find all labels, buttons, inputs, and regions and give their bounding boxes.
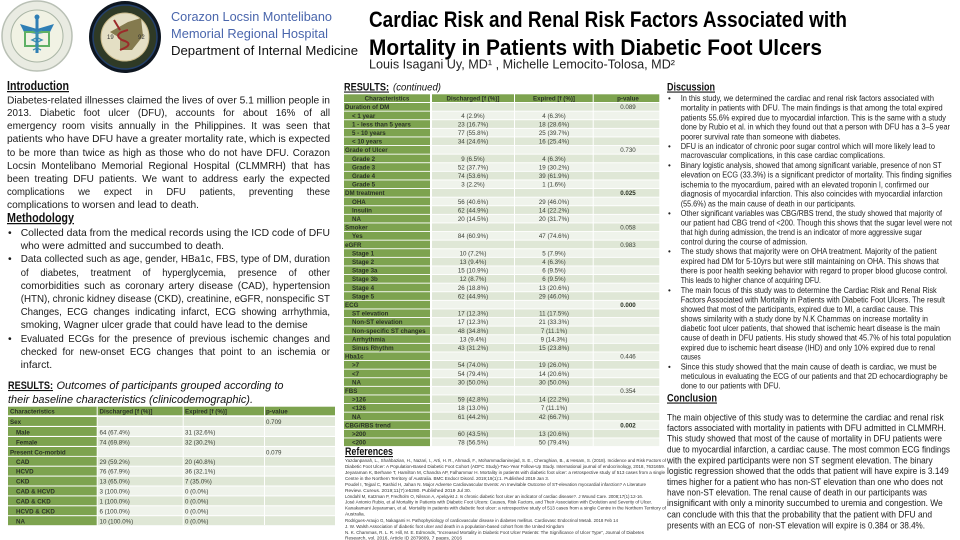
table text: 6 (9.5%) [542,276,566,283]
table: baseline characteristics: NA [16,518,25,525]
text block: discussion bullets: • [668,286,671,295]
text block: discussion bullets: expired had DM for 5-10yrs but were still maintaining on OHA. This shows that [681,257,940,266]
table text: Sinus Rhythm [352,345,394,352]
table text: 20 (14.5%) [458,216,488,223]
panel: methodology [7,211,331,371]
text block: discussion bullets: (55.6%) as the main cause of death in our participants. [681,199,856,208]
heading: results clinicodemographic: their baseline characteristics (clinicodemographic). [8,394,253,406]
table text: 12 (8.7%) [460,276,486,283]
text block: reference list: J. W. Walsh Association of diabetic foot ulcer and death in a population-based cohort from the United Kingdom [345,524,564,530]
heading: discussion: Discussion [667,82,715,94]
table text: 17 (12.3%) [458,319,488,326]
table text: 0.000 [620,302,636,309]
table text: 39 (61.9%) [539,173,569,180]
text block: discussion bullets: • [668,247,671,256]
heading: methodology: Methodology [7,211,74,225]
text block: introduction body: to be more than twice as high as those who do not have DFU. Corazon [7,148,330,159]
table text: ST elevation [352,311,389,318]
text block: discussion bullets: The study shows that majority were on OHA treatment. Majority of the patient [681,247,937,256]
heading: results continued: RESULTS: [344,82,389,94]
text block: discussion bullets: Factors Associated with Mortality in Patients with Diabetic Foot Ulcers. The result [681,295,946,304]
table text: 10 (7.2%) [460,250,486,257]
table: baseline characteristics: Expired [f (%)] [185,408,227,415]
table text: 3 (2.2%) [461,182,485,189]
text block: reference list: Yazdanpanah, L., Shahbazian, H., Nazari, I., Arti, H. R., Ahmadi, F., Mohammadianinejad, S. E., Cheraghian, B., & Hesam, S. (2018). Incidence and Risk Factors of [345,458,667,464]
heading: introduction: Introduction [7,79,69,93]
table text: 77 (55.8%) [458,130,488,137]
table text: 47 (74.6%) [539,233,569,240]
table text: 19 (26.0%) [539,362,569,369]
table text: 61 (44.2%) [458,414,488,421]
table text: 29 (46.0%) [539,199,569,206]
table text: 56 (40.6%) [458,199,488,206]
table: baseline characteristics: Characteristics [10,408,55,415]
table: baseline characteristics: CAD & CKD [16,499,51,506]
text block: reference list: N. K. Chammas, R. L. R. Hill, M. E. Edmonds, "Increased Mortality in Diabetic Foot Ulcer Patients: The Significance of Ulcer Type", Journal of Diabetes [345,530,645,536]
table: baseline characteristics: 1 (100.0%) [100,499,130,506]
table text: 50 (79.4%) [539,440,569,447]
table text: 14 (20.6%) [539,371,569,378]
table text: Yes [352,233,363,240]
text block: discussion bullets: there is poor health seeking behavior with regard to proper blood glucose control. [681,266,948,275]
table text: 23 (16.7%) [458,121,488,128]
table: baseline characteristics: 29 (59.2%) [100,459,130,466]
text block: introduction body: emergency room visits annually in the Philippines. It was seen that [7,121,330,132]
table text: 4 (6.3%) [542,113,566,120]
text block: discussion bullets: macrovascular complications, in this case cardiac complications. [681,151,885,160]
table text: 62 (44.9%) [458,207,488,214]
text block: discussion bullets: done to our patients with DFU. [681,382,781,391]
icon: department of medicine seal: 19 [107,35,114,41]
table text: 5 (7.9%) [542,250,566,257]
title [369,7,847,60]
table text: Stage 5 [352,293,375,300]
table: baseline characteristics: CAD [16,459,30,466]
table text: Stage 3a [352,268,378,275]
text block: discussion bullets: • [668,161,671,170]
heading: conclusion: Conclusion [667,392,717,404]
table text: DM treatment [345,190,385,197]
table text: Expired [f (%)] [533,96,575,103]
table: baseline characteristics: 6 (100.0%) [100,509,130,516]
table text: Grade 4 [352,173,376,180]
text block: reference list: Review. Cureus. 2019;11(7):e5280. Published 2019 Jul 30. [345,488,471,494]
text block: discussion bullets: showed that most of the participants, expired due to MI, a cardiac cause. This [681,305,923,314]
text block: reference list: Jeyaraman K, Berhane T, Hamilton M, Chandra AP, Falhammar H. Mortality in patients with diabetic foot ulcer: a retrospective study of 513 cases from a single [345,470,665,476]
table text: <126 [352,405,366,412]
table text: 18 (28.6%) [539,121,569,128]
table text: 4 (6.3%) [542,156,566,163]
table: baseline characteristics: 0 (0.0%) [185,509,208,516]
table text: 1 (1.6%) [542,182,566,189]
table text: ECG [345,302,359,309]
text block: reference list: Diabetic Foot Ulcer: A Population-Based Diabetic Foot Cohort (ADFC Study)-Two-Year Follow-Up Study. International journal of endocrinology, 2018, 7631659. [345,464,665,470]
text block: discussion bullets: DFU is an indicator of chronic poor sugar control which will more likely lead to [681,142,936,151]
table text: 30 (50.0%) [539,379,569,386]
table text: Duration of DM [345,104,389,111]
table text: 13 (9.4%) [460,336,486,343]
text block: methodology bullets: checked for new-onset ECG changes that point to an ischemia or [21,347,331,358]
hospital name: Memorial Regional Hospital [171,26,328,41]
table: baseline characteristics: 0 (0.0%) [185,499,208,506]
table text: Non-ST elevation [352,319,403,326]
text block: methodology bullets: • [8,254,12,265]
text block: methodology bullets: comorbidities such as coronary artery disease (CAD), hypertension [21,281,330,292]
table text [345,96,639,447]
table text: 13 (20.6%) [539,285,569,292]
table text: 54 (79.4%) [458,371,488,378]
table: results continued [344,94,659,447]
table text: 13 (9.4%) [460,259,486,266]
text block: reference list: Kanakamani Jeyaraman, et al. Mortality in patients with diabetic foot ulcer: a retrospective study of 513 cases from a single Centre in the Northern Territory of [345,506,667,512]
text block: reference list [345,458,667,540]
table text: 5 - 10 years [352,130,386,137]
table text: 0.983 [620,242,636,249]
table: baseline characteristics: Female [16,439,38,446]
table text: 18 (13.0%) [458,405,488,412]
text block: discussion bullets: diabetic foot ulcer patients, that showed that ischemic heart disease is the main [681,324,940,333]
table: baseline characteristics: 0 (0.0%) [185,489,208,496]
table text: 30 (50.0%) [458,379,488,386]
table text: 4 (6.3%) [542,259,566,266]
text block: methodology bullets: • [8,334,12,345]
text block: methodology bullets [8,228,331,371]
table text: 42 (66.7%) [539,414,569,421]
table text: 25 (39.7%) [539,130,569,137]
text block: methodology bullets: Data collected such as age, gender, HBa1c, FBS, type of DM, duration [21,254,330,265]
text block: conclusion body: presents with an ECG of non-ST elevation will expire is 0.384 or 38.4%. [667,520,925,530]
table: baseline characteristics: 10 (100.0%) [100,518,133,525]
table text: 14 (22.2%) [539,397,569,404]
table text: 13 (20.6%) [539,431,569,438]
text block: discussion bullets: expired due to ischemic heart disease (IHD) and only 10% expired due to renal [681,343,935,352]
text block: conclusion body: with the expired participants were non ST segment elevation. The binary [666,456,933,466]
table text: 54 (74.0%) [458,362,488,369]
table: baseline characteristics: 76 (67.9%) [100,469,130,476]
table: baseline characteristics: 3 (100.0%) [100,489,130,496]
text block: discussion bullets: In this study, we determined the cardiac and renal risk factors associated with [681,94,934,103]
table text: <200 [352,440,366,447]
text block: discussion bullets: that high during admission, the trend is an indicator of more aggressive sugar [681,228,922,237]
table: baseline characteristics: HCVD & CKD [16,509,55,516]
table text: 14 (22.2%) [539,207,569,214]
table text: Discharged [f (%)] [447,96,499,103]
table text: <7 [352,371,360,378]
table text: 21 (33.3%) [539,319,569,326]
text block: introduction body: Diabetes-related illnesses claimed the lives of over 5.1 million people in [7,96,330,106]
text block: introduction body [7,96,330,211]
table text: Grade 3 [352,164,376,171]
table text: Stage 4 [352,285,375,292]
text block: reference list: Centre in the Northern Territory of Australia. BMC Endocr Disord. 2019;19(1):1. Published 2019 Jan 3. [345,476,549,482]
table text: 1 - less than 5 years [352,121,411,128]
table text: Grade 5 [352,182,376,189]
text block: conclusion body: have non-ST elevation. The renal cause of death in our participants was [667,488,927,498]
table text: 0.002 [620,422,636,429]
text block: discussion bullets: shows similarity with a study done by N.K Chammas on increase mortality in [681,314,928,323]
table: baseline characteristics: Discharged [f (%)] [100,408,152,415]
text block: discussion bullets: ischemia to the myocardium, paired with an elevated troponin I, confirmed our [681,180,929,189]
table text: 60 (43.5%) [458,431,488,438]
table: baseline characteristics: 7 (35.0%) [185,479,212,486]
hospital name: Department of Internal Medicine [171,43,358,58]
text block: introduction body: patients who have DFU have a greater mortality rate, which is expected [7,134,330,145]
table text: 74 (53.6%) [458,173,488,180]
table: baseline characteristics: 32 (30.2%) [185,439,215,446]
table text: 0.025 [620,190,636,197]
table text: Stage 1 [352,250,375,257]
text block: discussion bullets: Since this study showed that the main cause of death is cardiac, we must be [681,362,937,371]
heading: results continued: (continued) [393,82,441,94]
text block: introduction body: complications to worsen and lead to death. [7,200,199,211]
hospital name [171,9,358,58]
text block: conclusion body [666,412,950,530]
table text: Grade of Ulcer [345,147,388,154]
table: baseline characteristics: 13 (65.0%) [100,479,130,486]
table text: Arrhythmia [352,336,386,343]
table text: 15 (10.9%) [458,268,488,275]
panel: discussion [667,82,953,391]
table text: 0.446 [620,354,636,361]
text block: methodology bullets: • [8,228,12,239]
table: baseline characteristics: Male [16,430,30,437]
table text: OHA [352,199,366,206]
table text: 62 (44.9%) [458,293,488,300]
table text: NA [352,216,361,223]
table text: < 10 years [352,139,383,146]
table text: 11 (17.5%) [539,311,569,318]
table text: Non-specific ST changes [352,328,426,335]
table text: FBS [345,388,357,395]
table text: 84 (60.9%) [458,233,488,240]
table: baseline characteristics: 0 (0.0%) [185,518,208,525]
icon: department of medicine seal: 92 [138,35,145,41]
text block: introduction body: 2013. Diabetic foot ulcer (DFU), accounts for about 16% of all [7,108,330,119]
table: baseline characteristics: CKD [16,479,30,486]
heading: results clinicodemographic: Outcomes of participants grouped according to [56,380,284,392]
hospital name: Corazon Locsin Montelibano [171,9,332,24]
text block: discussion bullets: control during the course of admission. [681,238,808,247]
table text: 9 (14.3%) [541,336,567,343]
heading: results clinicodemographic [8,380,284,406]
text block: methodology bullets: (HTN), chronic kidney disease (CKD), creatinine, eGFR, nonspecific ST [21,294,331,305]
table: baseline characteristics: Sex [10,419,22,426]
table: baseline characteristics: HCVD [16,469,34,476]
table: baseline characteristics: 31 (32.6%) [185,430,215,437]
table text: < 1 year [352,113,376,120]
text block: discussion bullets: • [668,142,671,151]
table text: p-value [617,96,639,103]
text block: methodology bullets: Changes, ECG changes indicating infarct, ECG showing arrhythmia, [21,307,330,318]
table text: NA [352,414,361,421]
text block: reference list: José Antonio Rubio, et al Mortality in Patients with Diabetic Foot Ulcers: Causes, Risk Factors, and Their Association with Evolution and Severity of Ulcer. [345,500,652,506]
title: Mortality in Patients with Diabetic Foot Ulcers [369,35,822,60]
table text: Stage 2 [352,259,375,266]
panel: introduction [7,79,330,211]
text block: methodology bullets: Collected data from the medical records using the ICD code of DFU [21,228,330,239]
table text: 78 (56.5%) [458,440,488,447]
table text: 52 (37.7%) [458,164,488,171]
text block: reference list: Poudel I, Tejpal C, Rashid H, Jahan N. Major Adverse Cardiovascular Events: An Inevitable Outcome of ST-elevation myocardial infarction? A Literature [345,482,646,488]
table text: Insulin [352,207,372,214]
table text: Stage 3b [352,276,378,283]
table: baseline characteristics: 64 (67.4%) [100,430,130,437]
text block: discussion bullets: poorer survival rate than someone with diabetes. [681,132,841,141]
text block: introduction body: been treating DFU patients. We want to address early the expected [7,174,330,185]
text block: discussion bullets: • [668,209,671,218]
text block: methodology bullets: Evaluated ECGs for the presence of previous ischemic changes and [21,334,330,345]
table: baseline characteristics: 36 (32.1%) [185,469,215,476]
table text: 34 (24.6%) [458,139,488,146]
icon: hospital logo [2,1,72,71]
text block: conclusion body: can conclude with this that the probability that the patient with DFU and [667,510,932,520]
text block: reference list: Australia. [345,512,365,518]
panel: conclusion [666,392,950,530]
text block: discussion bullets: diagnosis of myocardial infarction. This also coincides with myocardial infarction [681,190,943,199]
table text: 20 (31.7%) [539,216,569,223]
table text: 6 (9.5%) [542,268,566,275]
table text: 7 (11.1%) [541,328,567,335]
table text: 0.354 [620,388,636,395]
table: baseline characteristics: 0.079 [266,449,282,456]
table rows [344,103,659,446]
table text: 0.089 [620,104,636,111]
table text: 17 (12.3%) [458,311,488,318]
table text: CBG/RBS trend [345,422,391,429]
table text: 29 (46.0%) [539,293,569,300]
table text: >7 [352,362,360,369]
table text: Characteristics [365,96,410,103]
table text: >200 [352,431,366,438]
table text: 59 (42.8%) [458,397,488,404]
table: baseline characteristics: 74 (69.8%) [100,439,130,446]
table: baseline characteristics: CAD & HCVD [16,489,55,496]
text block: discussion bullets: • [668,362,671,371]
text block: discussion bullets [668,94,953,391]
table text: 48 (34.8%) [458,328,488,335]
authors: Louis Isagani Uy, MD¹ , Michelle Lemocito-Tolosa, MD² [369,58,675,72]
table text: 9 (6.5%) [461,156,485,163]
title: Cardiac Risk and Renal Risk Factors Associated with [369,7,847,32]
heading: results continued [344,82,441,94]
text block: introduction body: complications we expect in DFU patients, preventing these [7,187,330,198]
table: baseline characteristics: p-value [266,408,288,415]
text block: discussion bullets: This leads to higher chance of acquiring DFU. [681,276,821,285]
text block: discussion bullets: • [668,94,671,103]
text block: reference list: Löndahl M, Katzman P, Fredholm O, Nilsson A, Apelqvist J. Is chronic diabetic foot ulcer an indicator of cardiac disease?. J Wound Care. 2008;17(1):12-16. [345,494,643,500]
table: baseline characteristics: Present Co-morbid [10,449,66,456]
table text: 19 (30.2%) [539,164,569,171]
text block: discussion bullets: The main focus of this study was to determine the Cardiac Risk and Renal Risk [681,286,938,295]
text block: introduction body: Locsin Montelibano Memorial Regional Hospital (CLMMRH) that has [7,161,330,172]
text block: discussion bullets: causes [681,353,701,362]
text block: methodology bullets: smoking, Wagner ulcer grade that could have lead to the demise [21,320,308,331]
table text: 15 (23.8%) [539,345,569,352]
table: baseline characteristics [8,407,335,525]
table text: Grade 2 [352,156,376,163]
table text: 26 (18.8%) [458,285,488,292]
table text: Smoker [345,225,368,232]
table text: 7 (11.1%) [541,405,567,412]
heading: references: References [345,446,393,458]
table text: 4 (2.9%) [461,113,485,120]
table text: 43 (31.2%) [458,345,488,352]
heading: results clinicodemographic: RESULTS: [8,380,53,392]
text block: reference list: Rodrigues-Araujo G, Nakagami H. Pathophysiology of cardiovascular disease in diabetes mellitus. Cardiovasc Endocrinol Metab. 2018 Feb 14 [345,518,618,524]
table text: 0.730 [620,147,636,154]
table text: Hba1c [345,354,364,361]
icon: department of medicine seal [89,1,161,73]
table text: 0.058 [620,225,636,232]
text block: methodology bullets: who were admitted and succumbed to death. [20,241,224,252]
text block: discussion bullets: mortality in patients with DFU. The main findings is that among the total expired [681,103,943,112]
table text: 16 (25.4%) [539,139,569,146]
table: baseline characteristics: 0.709 [266,419,282,426]
table text: eGFR [345,242,362,249]
text block: methodology bullets: of diabetes, treatment of hyperglycemia, presence of other [21,268,330,279]
table text: NA [352,379,361,386]
table text: >126 [352,397,366,404]
text block: methodology bullets: infarct. [21,360,52,371]
table: baseline characteristics: 20 (40.8%) [185,459,215,466]
panel: references [345,446,667,540]
